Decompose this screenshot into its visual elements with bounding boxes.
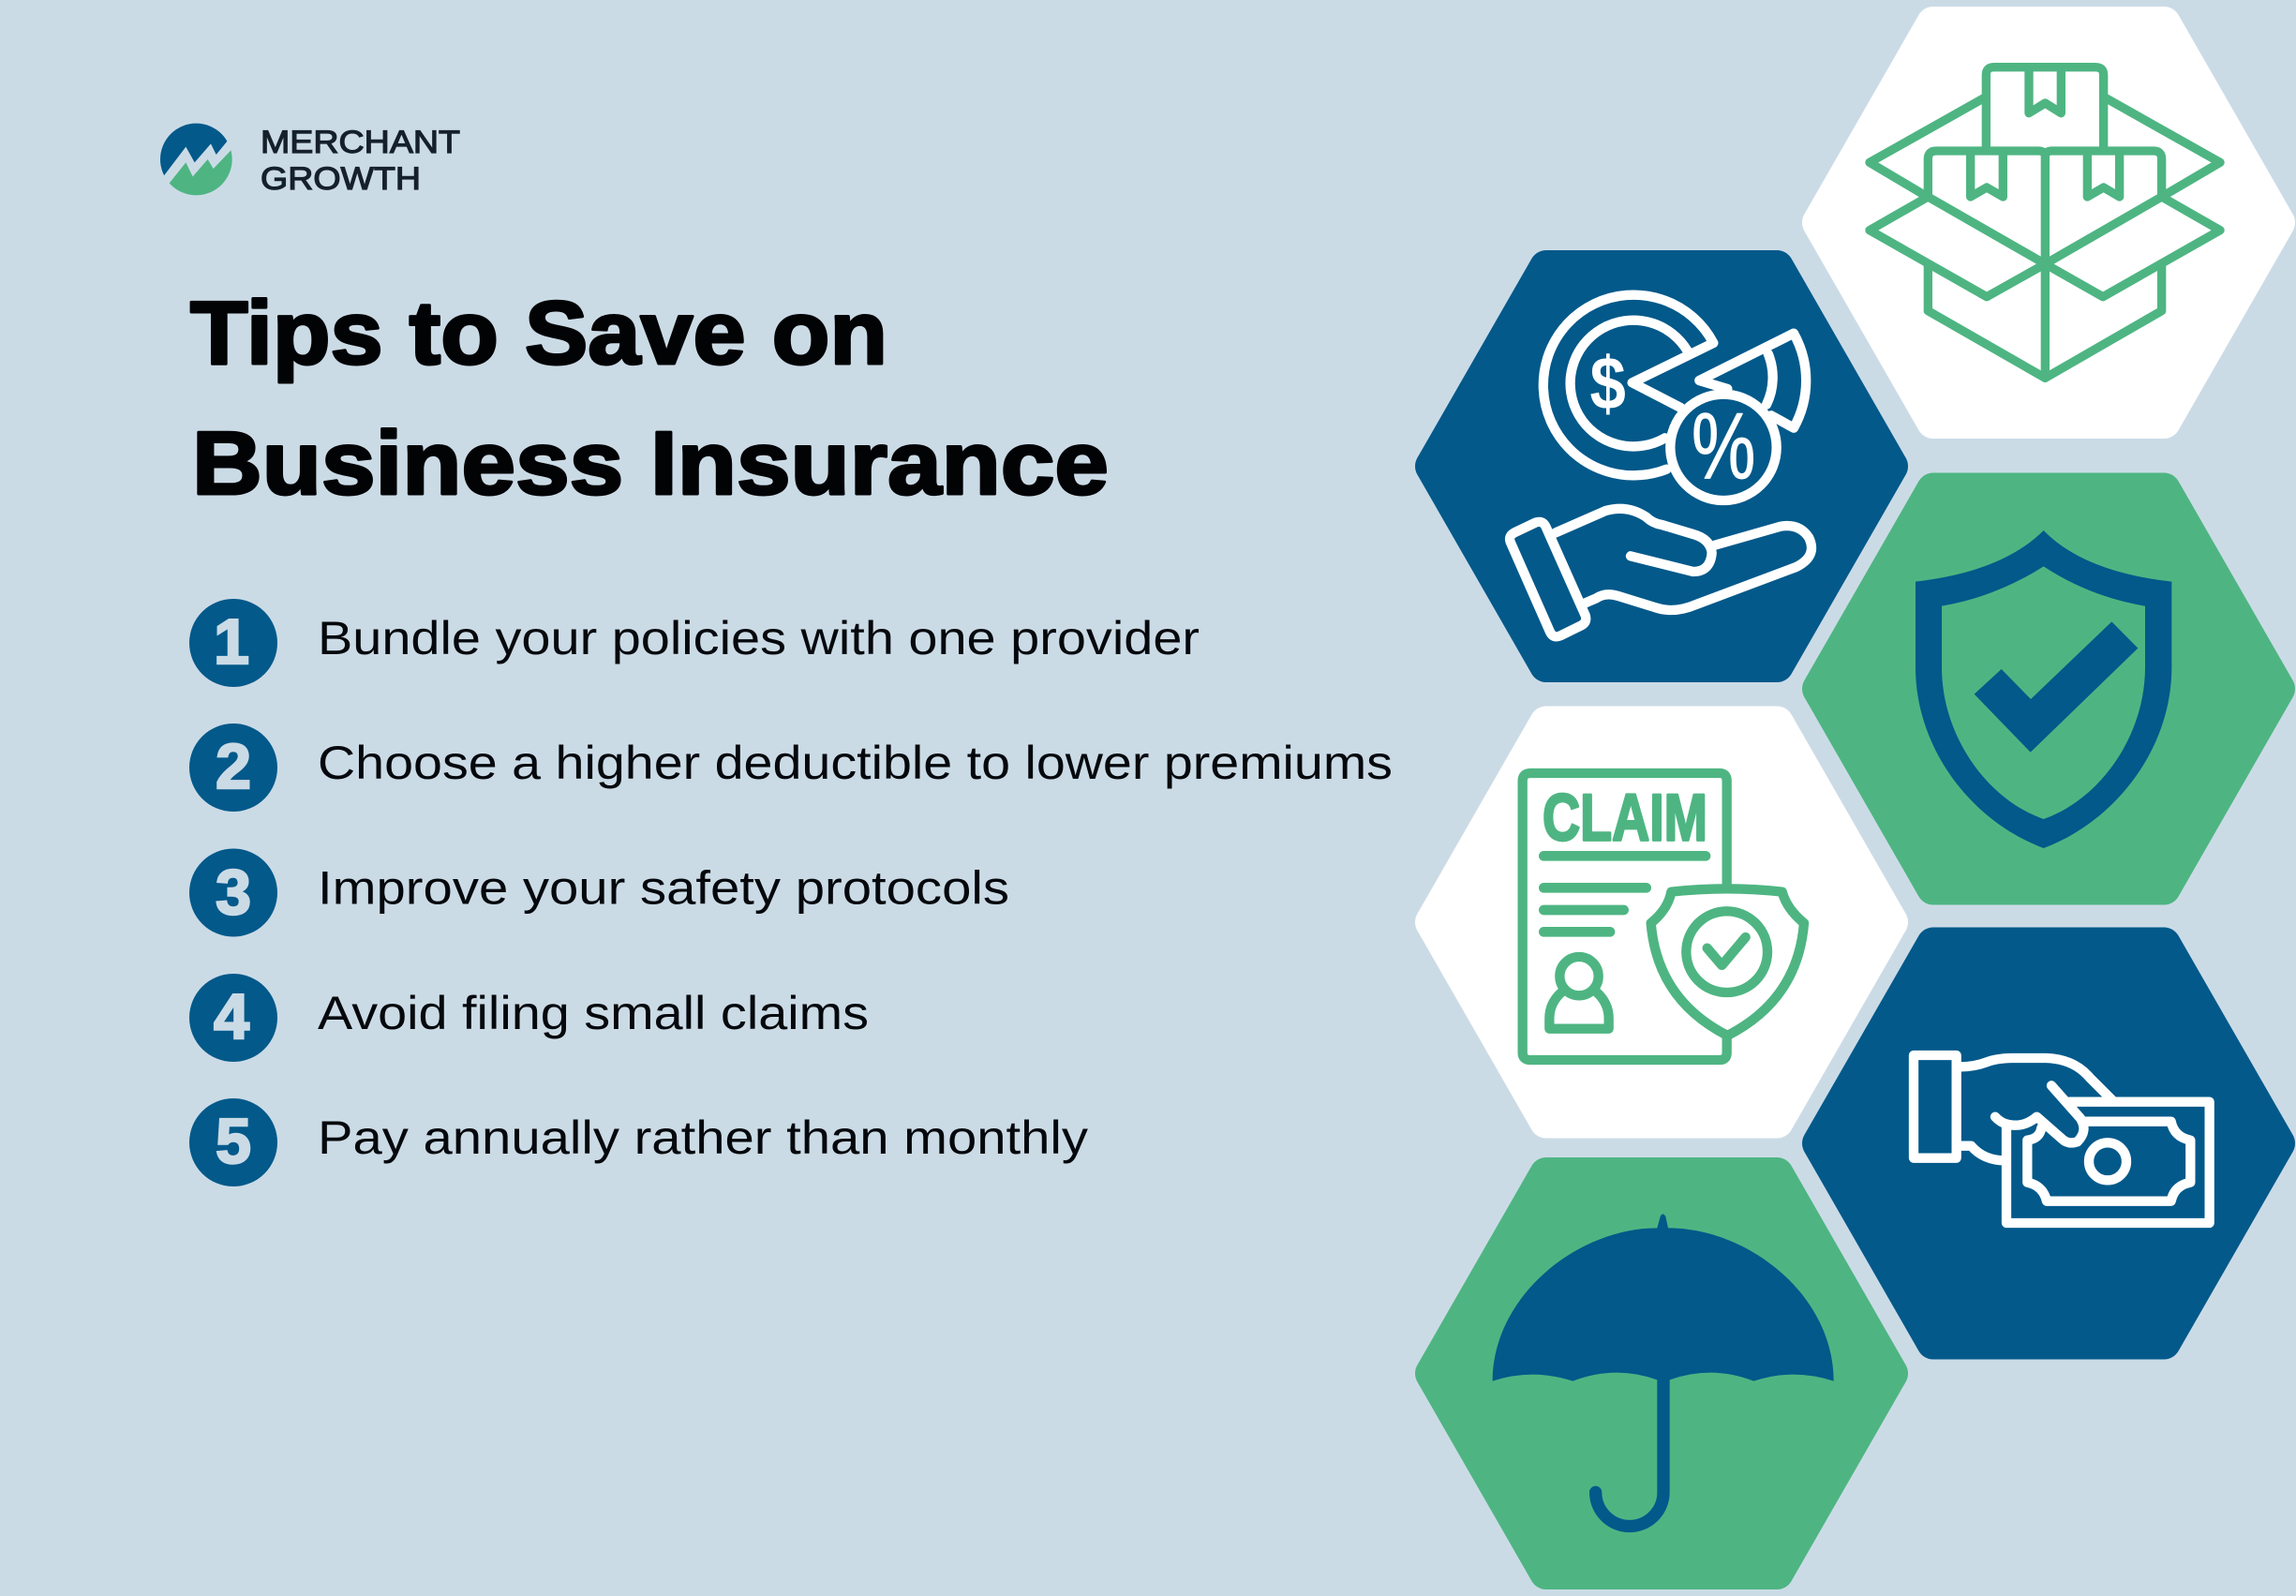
title [190, 283, 1109, 514]
hexagon: green, shield [1819, 489, 2278, 888]
hexagon: white, claim [1432, 723, 1891, 1121]
tip 4 [189, 974, 869, 1062]
tip 5: 5 [216, 1106, 251, 1177]
tip 3: Improve your safety protocols [318, 862, 1009, 915]
tip 1: Bundle your policies with one provider [318, 612, 1200, 664]
icon: hand with dollar pie and percent: % [1692, 395, 1755, 500]
tip 3 [189, 849, 1009, 937]
tip 1 [189, 599, 1200, 687]
logo wordmark: MERCHANT [261, 125, 460, 160]
icon: umbrella [1493, 1214, 1834, 1526]
tips list [189, 599, 1393, 1186]
logo mark [160, 124, 232, 195]
tip 1: 1 [214, 606, 249, 678]
tip 2: 2 [216, 731, 251, 802]
logo: Merchant Growth [160, 124, 460, 195]
tip 2: Choose a higher deductible to lower premiums [318, 737, 1393, 789]
hexagon: blue, savings [1432, 267, 1891, 665]
icon: claim form with shield: CLAIM [1543, 781, 1707, 855]
title: Business Insurance [192, 413, 1109, 514]
tip 2 [189, 723, 1393, 812]
hexagon: green, umbrella [1432, 1174, 1891, 1573]
icon: open boxes [1870, 67, 2220, 378]
title: Tips to Save on [190, 283, 887, 383]
logo wordmark: GROWTH [261, 161, 421, 197]
logo wordmark [261, 125, 460, 197]
tip 5 [189, 1098, 1088, 1186]
icon: hand holding banknote [1914, 1055, 2210, 1223]
icon: shield with check [1916, 530, 2171, 848]
icon: claim form with shield [1523, 773, 1804, 1060]
tip 4: Avoid filing small claims [318, 987, 869, 1039]
hexagon: white, boxes [1819, 23, 2278, 422]
tip 3: 3 [216, 857, 251, 928]
icon: hand with dollar pie and percent [1510, 295, 1811, 636]
tip 4: 4 [214, 981, 249, 1052]
hexagon: blue, payment [1819, 945, 2278, 1342]
icon: hand with dollar pie and percent: $ [1589, 342, 1626, 425]
tip 5: Pay annually rather than monthly [318, 1111, 1088, 1164]
